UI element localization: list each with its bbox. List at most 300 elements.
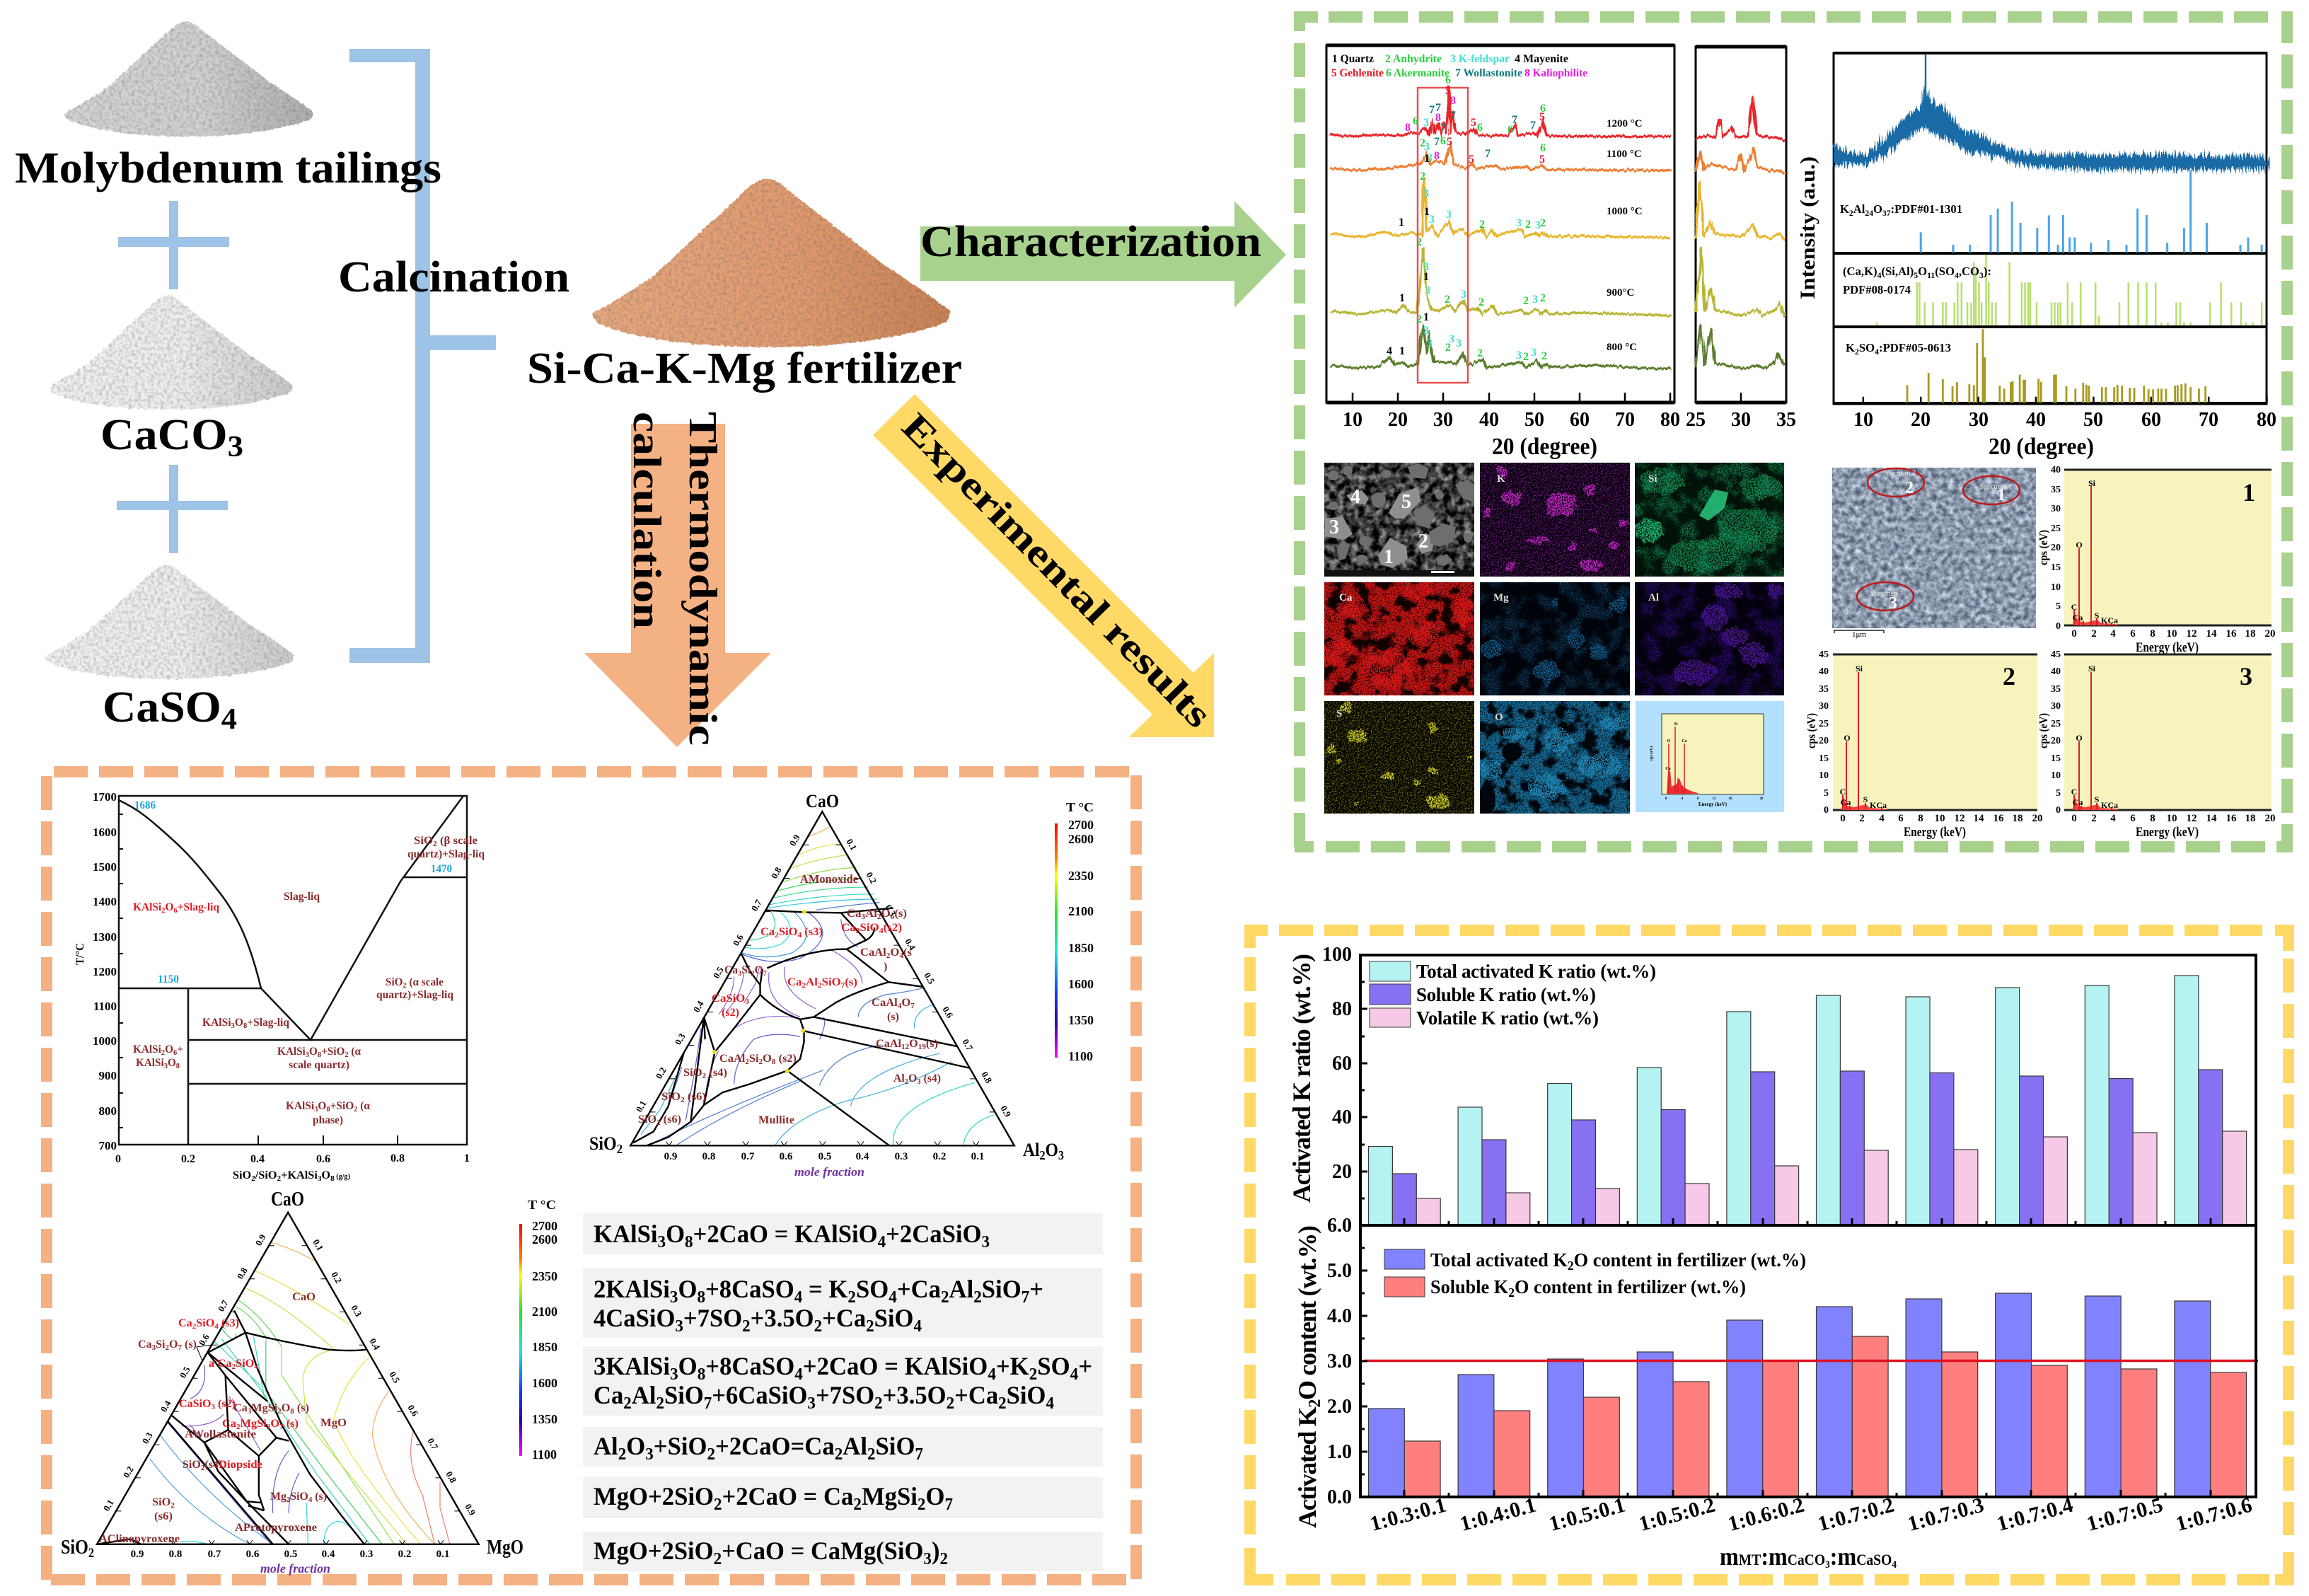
O map: O: [1495, 712, 1503, 723]
temperature labels: 1000 °C: [1607, 206, 1643, 217]
peak labels: 8: [1434, 150, 1440, 162]
label: calcination: Calcination: [338, 253, 569, 301]
equation 1: 3: [658, 1233, 666, 1251]
phase region labels: Mg: [270, 1491, 287, 1503]
phase legend: 2 Anhydrite: [1385, 53, 1442, 65]
chart: EDS spectrum 2: 4: [1879, 813, 1885, 824]
equation 1: +2CaSiO: [886, 1220, 981, 1248]
phase region labels: 8: [772, 1058, 776, 1066]
chart: CaO-SiO2-Al2O3 ternary diagram: 0.9: [787, 833, 802, 848]
Si map: Si: [1648, 473, 1657, 485]
chart: CaO-SiO2-Al2O3 ternary diagram: 0.4: [903, 937, 918, 952]
phase region labels: SiO: [683, 1067, 702, 1079]
chart: EDS spectrum 1: 8: [2150, 628, 2155, 640]
legend: Volatile K ratio (wt.%): [1416, 1007, 1599, 1029]
temperature colour legend: 2350: [532, 1269, 557, 1283]
equation 2: 2: [941, 1288, 949, 1307]
equation 2: 7: [1022, 1288, 1029, 1307]
equation 2: +3.5O: [751, 1304, 814, 1332]
chart: KAlSi3O8-SiO2 binary phase diagram: SiO: [386, 976, 404, 988]
S map: S: [1336, 708, 1342, 719]
chart: EDS spectrum 3: 6: [2130, 813, 2136, 824]
equation 2: 4CaSiO: [594, 1304, 678, 1332]
equation 2: +7SO: [683, 1304, 742, 1332]
mapping EDS spectrum inset: Energy (keV): [1699, 802, 1728, 807]
peak labels: 3: [1456, 337, 1462, 349]
x axis labels: 20: [1388, 409, 1408, 431]
phase region labels: Al: [806, 976, 818, 988]
ternary scale labels: 0.4: [322, 1549, 335, 1560]
chart: KAlSi3O8-SiO2 binary phase diagram: KAlSi: [133, 1043, 163, 1056]
equation 4: 2: [618, 1445, 626, 1464]
chart: XRD of product with PDF reference cards: 4: [1877, 270, 1881, 280]
phase region labels: MgSi: [251, 1402, 278, 1414]
x axis labels: 70: [1615, 409, 1635, 431]
equation 2: +8CaSO: [705, 1275, 794, 1303]
SEM image with spectrum points: [1832, 468, 2036, 639]
equation 1: KAlSi: [594, 1220, 660, 1248]
equation 3: 3KAlSi: [594, 1352, 673, 1380]
equation 3: +Ca: [954, 1381, 998, 1409]
phase region labels: O: [901, 997, 910, 1009]
chart: EDS spectrum 2: O: [1844, 733, 1851, 743]
chart: KAlSi3O8-SiO2 binary phase diagram: 0.8: [390, 1152, 405, 1164]
legend: 2: [1508, 1285, 1515, 1300]
equation 1: 4: [878, 1233, 886, 1251]
chart: CaO-SiO2-Al2O3 ternary diagram: SiO: [589, 1133, 619, 1154]
axis labels: 5.0: [1327, 1260, 1352, 1282]
peak labels: 5: [1539, 111, 1545, 123]
chart: XRD of product with PDF reference cards: (SO: [1935, 265, 1955, 278]
chart: CaO-SiO2-MgO ternary diagram: 0.9: [463, 1502, 478, 1517]
ternary scale labels: 0.8: [169, 1549, 182, 1560]
phase region labels: Ca: [138, 1338, 152, 1351]
chart: XRD of product with PDF reference cards: :PDF#05-0613: [1879, 341, 1951, 354]
equation 1: O: [666, 1220, 685, 1248]
phase region labels: CaAl: [876, 1038, 901, 1050]
phase legend: [1331, 53, 1587, 79]
label: CaSO4: CaSO: [103, 683, 214, 732]
phase region labels: Si: [156, 1338, 166, 1351]
chart: EDS spectrum 2: 35: [1819, 684, 1829, 695]
peak labels: 3: [1446, 209, 1452, 221]
label: fertilizer: Si-Ca-K-Mg fertilizer: [527, 345, 962, 393]
phase legend: 8 Kaliophilite: [1524, 67, 1587, 79]
equation 4: Al: [594, 1432, 619, 1460]
equation 4: 7: [915, 1445, 923, 1464]
chart: EDS spectrum 3: 12: [2186, 813, 2197, 824]
chart: CaO-SiO2-MgO ternary diagram: 0.4: [158, 1399, 173, 1414]
peak labels: 7: [1429, 104, 1435, 116]
chart: KAlSi3O8-SiO2 binary phase diagram: 1200: [93, 965, 117, 978]
peak labels: 7: [1435, 102, 1441, 114]
peak labels: 2: [1479, 219, 1485, 231]
temperature colour legend: [519, 1198, 557, 1462]
chart: EDS spectrum 1: 10: [2166, 628, 2177, 640]
chart: EDS spectrum 3: 35: [2051, 684, 2061, 695]
mapping EDS spectrum inset: Ca: [1682, 739, 1687, 744]
volatile K bars: [1416, 1131, 2247, 1225]
chart: EDS spectrum 3: 15: [2051, 753, 2061, 764]
chart: XRD of product with PDF reference cards: 30: [1969, 409, 1989, 431]
phase region labels: Mullite: [758, 1114, 794, 1126]
vertex labels: CaO: [271, 1189, 304, 1210]
chart: XRD patterns at calcination temperatures: [1326, 45, 1680, 431]
phase region labels: 3: [861, 913, 866, 921]
phase region labels: AClinopyroxene: [99, 1533, 180, 1545]
chart: EDS spectrum 3: Ca: [2073, 797, 2083, 807]
chart: CaO-SiO2-MgO ternary diagram: 0.5: [178, 1365, 192, 1380]
equation 6: +CaO = CaMg(SiO: [722, 1537, 923, 1565]
chart: KAlSi3O8-SiO2 binary phase diagram: 3: [318, 1174, 322, 1183]
chart: EDS spectrum 2: 2: [2003, 662, 2015, 690]
phase region labels: 7: [178, 1343, 183, 1352]
chart: EDS spectrum 1: S: [2095, 611, 2100, 620]
chart: EDS spectrum 1: cps (eV): [2037, 530, 2050, 565]
plus sign 1: [118, 201, 229, 289]
chart: KAlSi3O8-SiO2 binary phase diagram: 3: [306, 1051, 310, 1059]
equation 1: [583, 1213, 1103, 1254]
peak labels: 5: [1447, 136, 1452, 148]
total activated K bars: [1368, 976, 2199, 1225]
equation 2: 8: [697, 1288, 705, 1307]
ternary scale labels: 0.7: [208, 1549, 221, 1560]
chart: CaO-SiO2-Al2O3 ternary diagram: 0.7: [749, 898, 764, 913]
chart: EDS spectrum 2: cps (eV): [1805, 713, 1818, 748]
temperature colour legend: 1600: [1068, 977, 1094, 991]
equation 6: 2: [714, 1550, 722, 1568]
chart: XRD of product with PDF reference cards: 10: [1853, 409, 1873, 431]
temperature colour legend: T °C: [1066, 800, 1094, 814]
arrow: thermodynamic calculation: [584, 412, 771, 747]
phase region labels: CaSiO: [712, 993, 743, 1005]
arrow: experimental results: Experimental results: [893, 405, 1220, 736]
chart: CaO-SiO2-Al2O3 ternary diagram: 0.2: [654, 1065, 669, 1081]
phase region labels: 2: [905, 1077, 909, 1086]
x axis labels: 50: [1524, 409, 1544, 431]
peak labels: 3: [1423, 261, 1429, 273]
chart: EDS spectrum 3: 8: [2150, 813, 2155, 824]
peak labels: 3: [1531, 347, 1537, 359]
mole fraction: mole fraction: [260, 1561, 330, 1575]
phase region labels: Ca: [178, 1317, 192, 1329]
phase region labels: 2: [856, 927, 860, 935]
equation 3: +7SO: [816, 1381, 874, 1409]
axis labels: 0.0: [1327, 1486, 1352, 1508]
chart: CaO-SiO2-Al2O3 ternary diagram: 0.6: [940, 1005, 956, 1020]
chart: EDS spectrum 3: Energy (keV): [2136, 825, 2199, 840]
temperature colour legend: 2700: [1068, 818, 1094, 832]
peak labels: 1: [1423, 311, 1429, 323]
chart: KAlSi3O8-SiO2 binary phase diagram: 2: [161, 1048, 166, 1057]
peak labels: 6: [1413, 115, 1418, 127]
phase region labels: (s): [845, 976, 857, 988]
chart: XRD of product with PDF reference cards: [1834, 53, 2276, 431]
phase region labels: (s6): [661, 1114, 681, 1126]
phase region labels: [99, 1291, 347, 1545]
ternary scale labels: 0.5: [284, 1549, 297, 1560]
chart: XRD of product with PDF reference cards: SO: [1859, 341, 1875, 354]
equation 5: [583, 1477, 1103, 1518]
Mg map: Mg: [1493, 592, 1509, 603]
SEM image with spectrum points: 1μm: [1852, 630, 1866, 639]
phase region labels: 2: [170, 1501, 175, 1510]
phase region labels: O: [270, 1418, 279, 1430]
chart: EDS spectrum 2: 6: [1898, 813, 1904, 824]
phase region labels: 2: [267, 1423, 271, 1431]
chart: CaO-SiO2-Al2O3 ternary diagram: 2: [617, 1142, 623, 1156]
chart: EDS spectrum 3: 45: [2051, 649, 2061, 660]
x axis category labels: 1:0.7:0.6: [2173, 1493, 2255, 1536]
chart: EDS spectrum 2: 15: [1819, 753, 1829, 764]
equation 2: [583, 1268, 1103, 1338]
chart: activated K ratio bars: Activated K ratio (wt.%): [1287, 954, 1316, 1203]
chart: CaO-SiO2-Al2O3 ternary diagram: 0.1: [844, 837, 859, 852]
peak labels: 3: [1427, 337, 1433, 349]
chart: EDS spectrum 1: 10: [2051, 582, 2061, 593]
SEM image with numbered particles: 3: [1329, 516, 1339, 538]
chart: CaO-SiO2-MgO ternary diagram: 0.1: [311, 1237, 325, 1253]
chart: EDS spectrum 3: 10: [2166, 813, 2177, 824]
chart: EDS spectrum 2: 10: [1934, 813, 1945, 824]
phase region labels: O: [890, 947, 899, 959]
ternary scale labels: 0.2: [398, 1549, 411, 1560]
chart: CaO-SiO2-MgO ternary diagram: 0.3: [349, 1303, 364, 1319]
chart: activated K2O content bars: Activated K: [1293, 1406, 1321, 1528]
panel: reaction equations: [583, 1213, 1103, 1571]
chart: XRD zoomed window 25-35 degrees: [1686, 47, 1796, 431]
chart: CaO-SiO2-MgO ternary diagram: 0.2: [121, 1464, 136, 1480]
chart: EDS spectrum 3: 40: [2051, 666, 2061, 677]
peak labels: 3: [1449, 333, 1454, 345]
equation 3: SiO: [1007, 1381, 1046, 1409]
chart: KAlSi3O8-SiO2 binary phase diagram: 1400: [93, 895, 117, 908]
chart: XRD of product with PDF reference cards: 20: [1911, 409, 1931, 431]
x axis category labels: 1:0.6:0.2: [1725, 1493, 1807, 1536]
axis labels: 20: [1332, 1161, 1352, 1183]
x axis title: :m: [1830, 1542, 1856, 1571]
x axis category labels: 1:0.5:0.1: [1546, 1493, 1628, 1536]
chart: KAlSi3O8-SiO2 binary phase diagram: SiO: [414, 835, 432, 847]
equation 1: 3: [981, 1233, 990, 1251]
x axis category labels: 1:0.7:0.3: [1905, 1493, 1986, 1536]
phase region labels: 2: [236, 1423, 241, 1431]
equation 2: +Ca: [897, 1275, 941, 1303]
equation 4: 2: [707, 1445, 715, 1464]
phase region labels: (s): [182, 1338, 197, 1351]
equation 2: Al: [949, 1275, 973, 1303]
equation 4: [583, 1427, 1103, 1467]
chart: EDS spectrum 3: 14: [2206, 813, 2217, 824]
peak labels: 4: [1387, 345, 1392, 357]
chart: KAlSi3O8-SiO2 binary phase diagram: O: [321, 1169, 330, 1181]
SEM image with numbered particles: [1324, 463, 1474, 577]
chart: CaO-SiO2-Al2O3 ternary diagram: 0.3: [673, 1031, 688, 1047]
panel: experimental results frame: [1250, 930, 2288, 1580]
x axis labels: 60: [1570, 409, 1590, 431]
peak labels: 2: [1420, 170, 1425, 183]
equation 6: 3: [923, 1550, 932, 1568]
peak labels: 8: [1405, 122, 1411, 134]
phase region labels: 7: [841, 981, 845, 990]
temperature labels: 800 °C: [1607, 342, 1637, 353]
phase region labels: 2: [759, 1058, 763, 1066]
phase region labels: 2: [277, 1407, 282, 1416]
phase region labels: 2: [232, 1363, 236, 1371]
phase region labels: Ca: [724, 964, 739, 976]
phase region labels: MgO: [320, 1417, 347, 1429]
peak labels: 2: [1416, 236, 1422, 248]
SEM image with spectrum points: 2: [1905, 479, 1914, 497]
chart: KAlSi3O8-SiO2 binary phase diagram: scale quartz): [289, 1059, 349, 1071]
peak labels: [1387, 74, 1547, 363]
chart: CaO-SiO2-Al2O3 ternary diagram: 0.2: [864, 870, 879, 886]
x axis labels: 30: [1433, 409, 1453, 431]
equation 3: 4: [1070, 1365, 1078, 1384]
phase region labels: SiO: [638, 1114, 656, 1126]
phase region labels: 4: [308, 1496, 313, 1504]
isotherm contours: [150, 1242, 450, 1544]
axis labels: 3.0: [1327, 1351, 1352, 1372]
phase region labels: 4: [214, 1322, 219, 1331]
chart: KAlSi3O8-SiO2 binary phase diagram: 3: [231, 1022, 235, 1030]
temperature colour legend: 2100: [1068, 904, 1094, 918]
chart: XRD of product with PDF reference cards: 80: [2257, 409, 2276, 431]
chart: EDS spectrum 2: 25: [1819, 719, 1829, 729]
peak labels: 2: [1523, 295, 1529, 307]
temperature colour legend: 1350: [1068, 1013, 1094, 1027]
peak labels: 8: [1450, 95, 1456, 107]
label: molybdenum tailings: Molybdenum tailings: [15, 144, 441, 192]
equation 3: 3: [670, 1365, 678, 1384]
peak labels: 2: [1540, 217, 1546, 229]
axis labels: 4.0: [1327, 1305, 1352, 1327]
chart: EDS spectrum 2: 10: [1819, 770, 1829, 781]
chart: EDS spectrum 1: 6: [2130, 628, 2136, 640]
legend: Soluble K: [1430, 1276, 1510, 1297]
chart: CaO-SiO2-Al2O3 ternary diagram: 0.9: [998, 1104, 1014, 1119]
equation 3: 2: [947, 1394, 954, 1413]
chart: KAlSi3O8-SiO2 binary phase diagram: 2: [433, 840, 437, 848]
chart: CaO-SiO2-Al2O3 ternary diagram: 0.3: [883, 903, 898, 918]
equation 4: SiO: [876, 1432, 915, 1460]
axis title: 2 theta left: 20 (degree): [1492, 434, 1597, 460]
peak labels: 3: [1461, 289, 1466, 301]
chart: XRD of product with PDF reference cards: ,CO: [1959, 265, 1979, 278]
phase region labels: SiO: [236, 1358, 254, 1370]
phase region labels: (s4): [921, 1072, 941, 1085]
chart: KAlSi3O8-SiO2 binary phase diagram: 3: [314, 1105, 318, 1114]
mapping EDS spectrum inset: 4: [1682, 797, 1684, 801]
soluble K2O bars: [1404, 1336, 2247, 1497]
chart: XRD of product with PDF reference cards: 70: [2199, 409, 2218, 431]
chart: KAlSi3O8-SiO2 binary phase diagram: O: [318, 1100, 326, 1112]
equation 3: [583, 1346, 1103, 1416]
chart: XRD of product with PDF reference cards: O: [1918, 265, 1927, 278]
chart: XRD zoomed window 25-35 degrees: 25: [1686, 409, 1706, 431]
phase region labels: 3: [211, 1403, 216, 1411]
peak labels: 5: [1471, 117, 1476, 129]
mapping EDS spectrum inset: [1636, 701, 1784, 812]
chart: KAlSi3O8-SiO2 binary phase diagram: 1700: [93, 790, 117, 804]
equation 3: +2CaO = KAlSiO: [803, 1352, 988, 1380]
peak labels: 5: [1539, 154, 1545, 166]
equation 2: 2: [742, 1317, 751, 1336]
peak labels: 3: [1516, 217, 1522, 229]
phase region labels: 2: [287, 1496, 291, 1504]
chart: KAlSi3O8-SiO2 binary phase diagram: 1000: [93, 1034, 117, 1048]
ternary scale labels: 0.9: [664, 1151, 677, 1162]
peak labels: 8: [1435, 112, 1441, 124]
peak labels: 2: [1477, 347, 1483, 359]
chart: EDS spectrum 2: Si: [1856, 664, 1863, 673]
chart: EDS spectrum 1: 20: [2051, 543, 2061, 553]
peak labels: 2: [1445, 294, 1450, 306]
phase boundaries: [630, 811, 1014, 1145]
phase region labels: Ca: [841, 922, 855, 934]
chart: CaO-SiO2-MgO ternary diagram: 0.6: [197, 1332, 212, 1348]
phase region labels: Ca: [233, 1402, 248, 1414]
mapping EDS spectrum inset: O: [1667, 739, 1671, 744]
equation 6: [583, 1532, 1103, 1571]
SEM image with spectrum points: 3: [1889, 594, 1897, 613]
chart: CaO-SiO2-Al2O3 ternary diagram: 0.8: [769, 865, 784, 881]
peak labels: 2: [1420, 137, 1425, 149]
phase region labels: (s): [294, 1402, 309, 1414]
chart: EDS spectrum 3: 4: [2110, 813, 2116, 824]
ternary scale labels: 0.3: [360, 1549, 373, 1560]
x axis category labels: [1367, 1493, 2255, 1536]
temperature labels: 1100 °C: [1607, 149, 1642, 160]
phase region labels: SiO: [290, 1491, 308, 1503]
chart: KAlSi3O8-SiO2 binary phase diagram: 0.6: [316, 1153, 330, 1165]
chart: XRD zoomed window 25-35 degrees: 35: [1776, 409, 1796, 431]
chart: KAlSi3O8-SiO2 binary phase diagram: +: [177, 1043, 183, 1056]
chart: CaO-SiO2-MgO ternary diagram: [61, 1189, 557, 1575]
peak labels: 3: [1535, 219, 1541, 231]
chart: EDS spectrum 1: Energy (keV): [2136, 640, 2199, 655]
chart: KAlSi3O8-SiO2 binary phase diagram: 2: [403, 981, 407, 990]
chart: activated K2O content bars: O content (wt.%): [1293, 1225, 1321, 1400]
chart: EDS spectrum 2: S: [1863, 794, 1868, 804]
phase region labels: (s3): [802, 926, 823, 938]
chart: KAlSi3O8-SiO2 binary phase diagram: 700: [99, 1139, 117, 1152]
equation 4: Al: [843, 1432, 867, 1460]
equation 5: 2: [918, 1496, 925, 1514]
chart: KAlSi3O8-SiO2 binary phase diagram: +SiO: [321, 1046, 345, 1058]
chart: EDS spectrum 3: 25: [2051, 719, 2061, 729]
peak labels: 6: [1540, 142, 1546, 154]
equation 6: 2: [939, 1550, 948, 1568]
phase region labels: Si: [741, 964, 751, 976]
panel: characterization frame: [1295, 17, 2293, 847]
K map: K: [1497, 473, 1505, 485]
legend: [1370, 961, 1656, 1029]
temperature colour legend: 2700: [532, 1219, 557, 1233]
chart: CaO-SiO2-MgO ternary diagram: 0.8: [444, 1469, 459, 1485]
temperature labels: 900°C: [1607, 287, 1634, 299]
PDF labels: 24: [1865, 208, 1873, 218]
chart: CaO-SiO2-MgO ternary diagram: 0.4: [367, 1336, 383, 1352]
peak labels: 1: [1424, 206, 1430, 218]
phase region labels: O: [908, 1072, 917, 1085]
arrow: characterization: Characterization: [920, 218, 1261, 266]
chart: CaO-SiO2-Al2O3 ternary diagram: O: [1046, 1140, 1058, 1160]
chart: CaO-SiO2-MgO ternary diagram: 2: [88, 1546, 94, 1561]
phase region labels: 2: [201, 1464, 205, 1472]
peak labels: 1: [1399, 292, 1405, 304]
soluble K bars: [1392, 1070, 2223, 1225]
